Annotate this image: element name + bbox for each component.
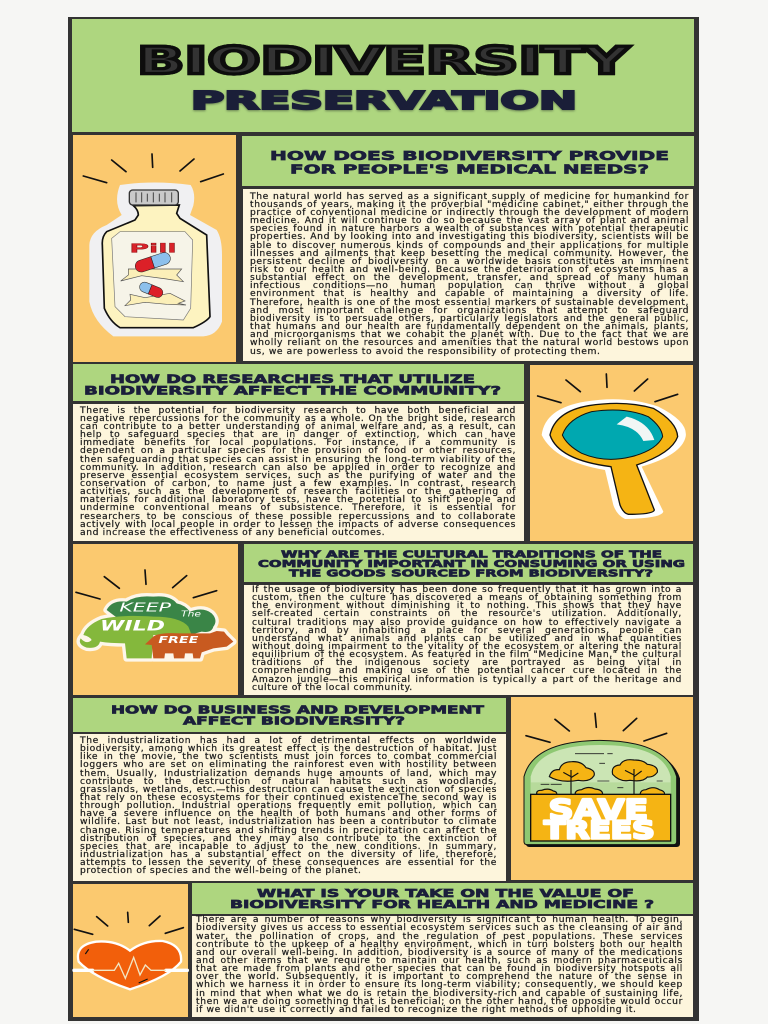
panel: cultural traditions heading: WHY ARE THE CULTURAL TRADITIONS OF THE [281, 549, 662, 560]
text block: health and medicine: water, the pollination of crops, and the regulation of pest populations. These services [196, 932, 683, 942]
panel: health and medicine heading: BIODIVERSITY FOR HEALTH AND MEDICINE ? [230, 898, 654, 911]
text block: medical needs: infectious conditions—no human population can thrive without a global [250, 281, 689, 291]
text block: medical needs: practice of conventional medicine or indirectly through the development of modern [250, 208, 689, 218]
icon: save trees badge: SAVE [549, 793, 648, 826]
text block: medical needs: thousands of years, making it the proverbial "medicine cabinet," either through the [250, 200, 689, 210]
icon: keep the wild free badge: WILD [100, 619, 165, 635]
text block: medical needs: risk to our health and well-being. Because the deterioration of ecosystems has a [250, 265, 689, 275]
text block: business and development: them. Usually, Industrialization demands huge amounts of land, which may [80, 769, 497, 779]
text block: cultural traditions: without doing impairment to the vitality of the ecosystem or altering the natural [252, 642, 682, 652]
text block: business and development: contribute to the destruction of natural habitats such as woodlands, [80, 777, 497, 787]
panel: health and medicine heading: WHAT IS YOUR TAKE ON THE VALUE OF [257, 887, 634, 900]
panel: medical needs text [243, 189, 693, 361]
text block: business and development: have a severe influence on the health of both humans and other forms of [80, 809, 497, 819]
text block: community: materials for additional laboratory tests, have the potential to shift people and [80, 495, 516, 505]
text block: business and development: through pollution. Industrial operations frequently emit pollution, which can [80, 801, 497, 811]
text block: medical needs: and microorganisms that we cohabit the planet with. Due to the fact that we are [250, 330, 689, 340]
panel: save trees illustration [511, 697, 693, 880]
text block: community: then safeguarding that species can assist in ensuring the long-term viability of the [80, 455, 516, 465]
text block: health and medicine: There are a number of reasons why biodiversity is significant to human health. To begin, [196, 915, 683, 925]
panel: business and development heading [73, 698, 506, 732]
text block: medical needs: environment that is healthy and capable of maintaining a diversity of life. [250, 289, 689, 299]
text block: community: and increase the effectiveness of any beneficial outcomes. [80, 528, 385, 538]
panel: medical needs heading [242, 136, 694, 186]
text block: business and development [80, 736, 497, 876]
icon: magnifying glass [536, 373, 686, 519]
panel: community text [73, 404, 524, 541]
text block: business and development: grasslands, wetlands, etc.—this destruction can cause the extinction of species [80, 785, 497, 795]
text block: community: can contribute to a better understanding of animal welfare and, as a result, can [80, 422, 516, 432]
text block: community: dependent on a particular species for the provision of food or other resources, [80, 446, 516, 456]
text block: cultural traditions: equilibrium of the ecosystem. As featured in the film "Medicine Man," the cultural [252, 650, 682, 660]
text block: medical needs: species found in nature harbors a wealth of substances with potential therapeutic [250, 224, 689, 234]
panel: pill bottle illustration [73, 135, 236, 362]
text block: community: conservation of carbon, to name just a few examples. In contrast, research [80, 479, 516, 489]
panel: keep the wild free illustration [73, 544, 238, 695]
text block: community: actively with local people in order to lessen the impacts of adverse consequences [80, 520, 516, 530]
text block: medical needs: illnesses and ailments that keep besetting the medical community. However, the [250, 249, 689, 259]
panel: cultural traditions heading: THE GOODS SOURCED FROM BIODIVERSITY? [289, 568, 653, 579]
text block: medical needs: substantial effect on the development, transfer, and spread of many human [250, 273, 689, 283]
text block: health and medicine [196, 915, 683, 1015]
icon: pill bottle [82, 153, 224, 336]
icon: keep the wild free badge: The [181, 610, 201, 619]
panel: community heading [73, 364, 524, 401]
text block: cultural traditions: cultural traditions may also provide guidance on how to effectively navigate a [252, 618, 682, 628]
text block: cultural traditions: culture of the local community. [252, 683, 413, 693]
text block: community: help to safeguard species that are in danger of extinction, which can have [80, 430, 516, 440]
text block: business and development: species that are incapable to adjust to the new conditions. In summary, [80, 842, 497, 852]
panel: community heading: HOW DO RESEARCHES THAT UTILIZE [110, 371, 475, 385]
text block: business and development: like in the movie, the two scientists must join forces to combat commercial [80, 752, 497, 762]
icon: save trees badge [524, 712, 680, 847]
icon: pill bottle: Pill [129, 241, 177, 256]
panel: community heading: BIODIVERSITY AFFECT THE COMMUNITY? [84, 383, 501, 397]
text block: medical needs: biodiversity is to persuade others, particularly legislators and the general public, [250, 314, 689, 324]
text block: business and development: attempts to lessen the severity of these consequences are essential for the [80, 858, 497, 868]
text block: cultural traditions: self-created certain constraints on the resource's utilization. Additionally, [252, 609, 682, 619]
text block: health and medicine: biodiversity gives us access to essential ecosystem services such as the cleansing of air and [196, 923, 683, 933]
text block: medical needs: able to discover numerous kinds of compounds and their applications for multiple [250, 241, 689, 251]
text block: business and development: that rely on these ecosystems for their continued existenceThe second way is [80, 793, 497, 803]
icon: keep the wild free badge: KEEP [119, 600, 172, 614]
panel: business and development text [73, 734, 506, 881]
text block: medical needs: us, we are powerless to avoid the responsibility of protecting them. [250, 347, 601, 357]
text block: cultural traditions: the environment without diminishing it to nothing. This shows that they have [252, 601, 682, 611]
text block: health and medicine: over the world. Subsequently, it is important to comprehend the nature of the sense in [196, 972, 683, 982]
text block: medical needs: that humans and our health are fundamentally dependent on the animals, plants, [250, 322, 689, 332]
panel: health and medicine text [192, 916, 693, 1017]
text block: community: immediate benefits for local populations. For instance, if a community is [80, 438, 516, 448]
text block: health and medicine: contribute to the upkeep of a healthy environment, which in turn bolsters both our health [196, 940, 683, 950]
text block: health and medicine: and our overall well-being. In addition, biodiversity is a source of many of the medications [196, 948, 683, 958]
text block: health and medicine: if we didn't use it correctly and failed to recognize the right methods of upholding it. [196, 1005, 637, 1015]
text block: medical needs: medicine. And it will continue to do so because the vast array of plant and animal [250, 216, 689, 226]
text block: cultural traditions: Amazon jungle—this empirical information is typically a part of the heritage and [252, 675, 682, 685]
text block: cultural traditions: territory, and by inhabiting a place for several generations, people can [252, 626, 682, 636]
text block: medical needs: and most important challenge for organizations that attempt to safeguard [250, 306, 689, 316]
text block: community: undermine conventional means of subsistence. Therefore, it is essential for [80, 503, 516, 513]
icon: save trees badge: TREES [544, 815, 655, 844]
text block: business and development: change. Rising temperatures and shifting trends in precipitation can affect the [80, 826, 497, 836]
text block: medical needs: The natural world has served as a significant supply of medicine for humankind for [250, 192, 689, 202]
panel: medical needs heading: FOR PEOPLE'S MEDICAL NEEDS? [290, 162, 649, 177]
text block: community: community. In addition, research can also be applied in order to recognize and [80, 463, 516, 473]
text block: business and development: distribution of species, and they may also contribute to the extinction of [80, 834, 497, 844]
text block: medical needs [250, 192, 689, 357]
text block: medical needs: properties. And by looking into and investigating this biodiversity, scientists will be [250, 232, 689, 242]
text block: cultural traditions: traditions of the indigenous society are portrayed as being vital in [252, 658, 682, 668]
text block: community: negative repercussions for the community as a whole. On the bright side, research [80, 414, 516, 424]
heading: PRESERVATION: PRESERVATION [191, 86, 577, 115]
panel: cultural traditions heading [244, 544, 693, 582]
text block: community: preserve essential ecosystem services, such as the purifying of water and the [80, 471, 516, 481]
text block: health and medicine: that are made from plants and other species that can be found in biodiversity hotspots all [196, 964, 683, 974]
icon: keep the wild free badge: FREE [158, 635, 199, 646]
text block: cultural traditions [252, 585, 682, 693]
text block: health and medicine: which we harness it in order to ensure its long-term viability; consequently, we should keep [196, 980, 683, 990]
panel: health and medicine heading [192, 883, 693, 914]
text block: business and development: industrialization has a substantial effect on the diversity of life, therefore, [80, 850, 497, 860]
text block: health and medicine: then we are doing something that is beneficial; on the other hand, the opposite would occur [196, 997, 683, 1007]
text block: health and medicine: in mind that when what we do is retain the biodiversity-rich and capable of sustaining life, [196, 989, 683, 999]
text block: business and development: protection of species and the well-being of the planet. [80, 866, 362, 876]
text block: business and development: biodiversity, among which its greatest effect is the destruction of habitat. Just [80, 744, 497, 754]
text block: community: activities, such as the development of research facilities or the gathering of [80, 487, 516, 497]
text block: cultural traditions: custom, then the culture has discovered a means of obtaining something from [252, 593, 682, 603]
panel: magnifier illustration [530, 365, 693, 541]
panel: business and development heading: AFFECT BIODIVERSITY? [183, 714, 405, 727]
icon: keep the wild free badge [75, 569, 237, 662]
text block: community: There is the potential for biodiversity research to have both beneficial and [80, 406, 516, 416]
text block: health and medicine: and other items that we require to maintain our health, such as modern pharmaceuticals [196, 956, 683, 966]
panel: title [72, 19, 694, 132]
icon: heart with pulse line [72, 912, 189, 990]
text block: cultural traditions: understand what animals and plants can be utilized and in what quantities [252, 634, 682, 644]
text block: cultural traditions: If the usage of biodiversity has been done so frequently that it has grown into a [252, 585, 682, 595]
text block: medical needs: persistent decline of biodiversity on a worldwide basis constitutes an imminent [250, 257, 689, 267]
heading: BIODIVERSITY: BIODIVERSITY [137, 40, 631, 82]
text block: medical needs: Therefore, health is one of the most essential markers of sustainable development, [250, 298, 689, 308]
text block: medical needs: wholly reliant on the resources and amenities that the natural world bestows upon [250, 338, 689, 348]
text block: business and development: The industrialization has had a lot of detrimental effects on worldwide [80, 736, 497, 746]
panel: medical needs heading: HOW DOES BIODIVERSITY PROVIDE [270, 149, 669, 164]
panel: cultural traditions heading: COMMUNITY IMPORTANT IN CONSUMING OR USING [258, 559, 685, 570]
text block: cultural traditions: comprehending and making use of the potential cancer cure located in the [252, 666, 682, 676]
panel: cultural traditions text [244, 585, 693, 695]
panel: heart illustration [73, 884, 188, 1017]
text block: business and development: loggers who are set on eliminating the rainforest even with hostility between [80, 760, 497, 770]
text block: community: researchers to be conscious of these possible repercussions and to collaborate [80, 512, 516, 522]
text block: community [80, 406, 516, 538]
panel: business and development heading: HOW DO BUSINESS AND DEVELOPMENT [111, 703, 485, 716]
text block: business and development: wildlife. Last but not least, industrialization has been a contributor to climate [80, 817, 497, 827]
